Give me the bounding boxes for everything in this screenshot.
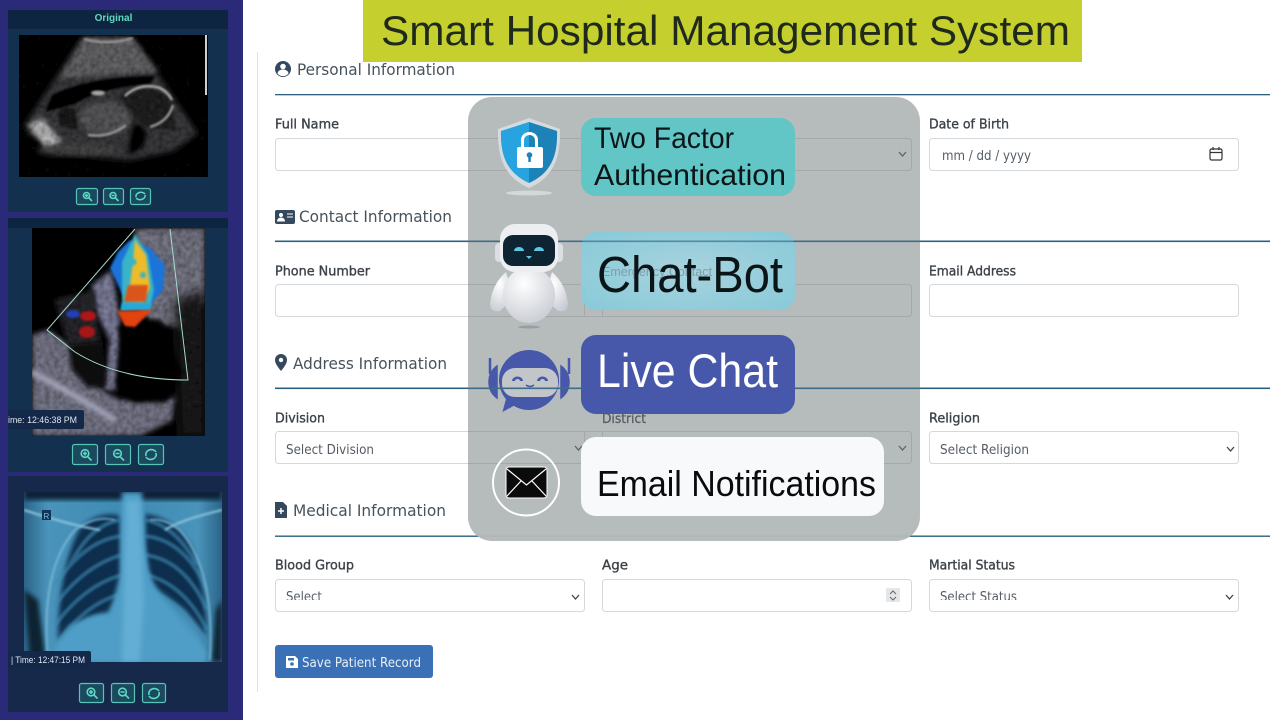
section: address information: Select Religion [940, 442, 1029, 458]
zoom controls [80, 684, 166, 702]
heading: Personal Information [297, 60, 455, 79]
icon: email envelope [493, 450, 559, 516]
image: chest x-ray: R [44, 512, 50, 521]
title banner: Smart Hospital Management System [381, 7, 1070, 54]
section: address information: Select Division [286, 442, 374, 458]
zoom controls [72, 444, 164, 464]
timestamp: | Time: 12:47:15 PM [11, 655, 85, 665]
pill: email notifications: Email Notifications [597, 463, 876, 504]
section: medical information: Select [286, 589, 322, 605]
timestamp [8, 651, 91, 669]
heading: Medical Information [293, 501, 446, 520]
panel: cardiac doppler [8, 218, 228, 472]
image: fetal ultrasound scan [19, 35, 208, 177]
section: medical information: Age [602, 558, 628, 574]
pill: email notifications [581, 437, 884, 516]
section: personal information: Date of Birth [929, 118, 1009, 132]
icon: id card [275, 210, 295, 224]
save button [275, 645, 433, 678]
section: medical information: Select Status [940, 589, 1017, 605]
pill: chat-bot [581, 232, 795, 310]
icon: live chat robot [468, 350, 581, 410]
section: medical information [275, 501, 1270, 612]
image: cardiac doppler scan [32, 228, 205, 436]
icon: medical file [275, 502, 287, 518]
section: personal information [275, 60, 1270, 170]
section: personal information: mm / dd / yyyy [942, 148, 1031, 164]
section: personal information: Full Name [275, 118, 339, 132]
icon: map pin [275, 354, 287, 371]
section: contact information [275, 207, 1270, 316]
panel: fetal ultrasound [8, 10, 228, 212]
icon: calendar [1210, 147, 1222, 160]
pill: live chat [581, 335, 795, 414]
pill: two factor authentication: Authentication [594, 159, 786, 192]
image: chest x-ray [24, 488, 222, 662]
sidebar [0, 0, 243, 720]
pill: live chat: Live Chat [597, 344, 778, 397]
timestamp: ime: 12:46:38 PM [8, 415, 77, 425]
heading: original: Original [95, 13, 133, 24]
section: address information: Division [275, 412, 325, 426]
save button: Save Patient Record [302, 655, 421, 671]
panel: feature overlay [468, 97, 920, 541]
heading: Address Information [293, 354, 447, 373]
pill: chat-bot: Chat-Bot [597, 246, 783, 303]
icon: floppy disk [286, 656, 298, 668]
faint label: district: District [602, 412, 646, 427]
patient form [257, 52, 1270, 692]
heading: Contact Information [299, 207, 452, 226]
section: contact information: Phone Number [275, 264, 371, 280]
section: address information: Religion [929, 412, 980, 426]
section: medical information: Martial Status [929, 558, 1015, 574]
icon: shield with padlock [498, 118, 560, 196]
pill: two factor authentication: Two Factor [594, 122, 734, 155]
section: contact information: Email Address [929, 264, 1016, 280]
panel: chest x-ray [8, 476, 228, 712]
icon: number spinner [886, 588, 900, 602]
section: medical information: Blood Group [275, 558, 354, 574]
icon: user [275, 61, 291, 77]
icon: chat robot [490, 224, 568, 328]
pill: chat-bot: Emergency Contact [602, 265, 713, 279]
timestamp [8, 410, 84, 429]
faint chevrons [575, 152, 906, 450]
section: address information [275, 354, 1270, 464]
zoom controls [76, 188, 150, 204]
pill: two factor authentication [581, 118, 795, 196]
